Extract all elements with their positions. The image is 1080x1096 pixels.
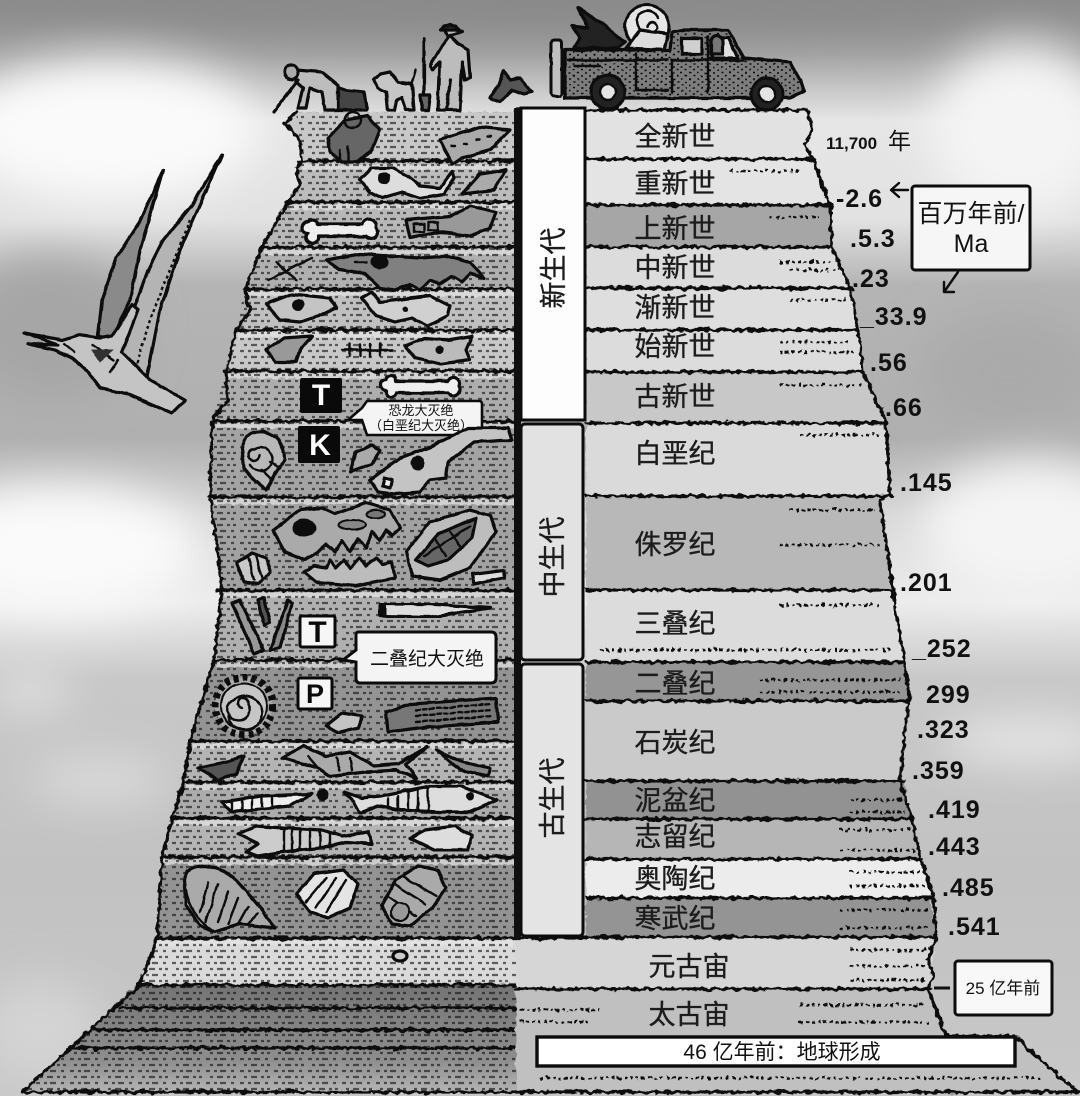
right strata column background — [516, 110, 1078, 1092]
era column: Paleozoic — [521, 664, 583, 936]
era column: Paleozoic: 古生代 — [538, 758, 568, 838]
fossil: orthocone — [378, 604, 490, 617]
callout: 2.5 billion years: 25 亿年前 — [966, 979, 1040, 998]
period labels: 白垩纪 — [634, 439, 716, 469]
age numbers — [826, 128, 1001, 941]
age numbers: 299 — [926, 681, 971, 709]
era column: Cenozoic: 新生代 — [539, 228, 569, 308]
fern in truck bed — [572, 8, 625, 48]
period labels: 元古宙 — [648, 952, 730, 982]
period labels: 始新世 — [634, 332, 716, 362]
age numbers: .66 — [885, 394, 923, 422]
age numbers: .541 — [948, 913, 1001, 941]
fossils: Quaternary saber skull and leaf — [328, 112, 510, 164]
callout: Permian extinction: 二叠纪大灭绝 — [370, 648, 484, 670]
callout: 2.5 billion years — [934, 961, 1052, 1015]
arrow: to 33.9 — [944, 272, 958, 292]
age numbers: .485 — [942, 874, 995, 902]
fossil: enrolled trilobite — [382, 866, 446, 926]
fossil: shell near P — [326, 713, 362, 733]
icon: dog — [374, 70, 416, 110]
marker: T white box — [300, 616, 335, 649]
era column: Mesozoic: 中生代 — [538, 516, 568, 598]
fossil: theropod skull — [273, 503, 400, 586]
marker: P white box: P — [306, 679, 324, 709]
era column: Cenozoic — [521, 108, 585, 420]
age numbers: .145 — [900, 469, 953, 497]
period labels: 上新世 — [634, 214, 716, 244]
column divider — [514, 110, 521, 938]
icon: pickup truck with ammonite and fern — [551, 5, 804, 110]
age numbers: _33.9 — [859, 303, 928, 331]
callout: Ma unit — [912, 186, 1030, 270]
callout: dinosaur extinction: （白垩纪大灭绝） — [369, 418, 473, 433]
fossil: fish skeleton — [344, 786, 497, 813]
fossil: crested dinosaur skull — [370, 428, 512, 494]
period labels: 中新世 — [634, 253, 716, 283]
fossil: small shell — [237, 553, 271, 584]
period labels: 石炭纪 — [634, 728, 716, 758]
period labels: 二叠纪 — [634, 669, 716, 699]
fossil: fern in oval — [406, 510, 504, 584]
fossil: small shell lump — [410, 826, 472, 850]
fossils: small bones — [266, 336, 472, 364]
fossil: pebble — [393, 951, 407, 961]
fossil: trilobite — [184, 866, 275, 932]
callout: Permian extinction — [343, 632, 496, 683]
marker: K black box — [298, 426, 340, 463]
period labels: 寒武纪 — [634, 904, 716, 934]
arrow: to 2.6 — [891, 183, 908, 197]
callout: dinosaur extinction — [348, 401, 482, 435]
fossil: fan shell — [198, 756, 244, 780]
fossils: skull with tusk and leaf — [360, 168, 506, 198]
age numbers: .323 — [917, 716, 970, 744]
period labels: 侏罗纪 — [634, 530, 716, 560]
icon: shrub — [490, 70, 532, 102]
fossil: long fish — [282, 746, 427, 778]
age numbers: 年 — [888, 128, 911, 154]
age numbers: -2.6 — [836, 185, 883, 213]
age numbers: .359 — [912, 757, 965, 785]
icon: crouching fossil hunter — [274, 65, 367, 112]
fossil: seed stalks — [232, 598, 292, 654]
age numbers: .23 — [852, 265, 890, 293]
fossil: crinoid stem — [386, 698, 498, 732]
truck body — [551, 30, 804, 110]
icon: pterosaur — [24, 155, 222, 413]
period labels: 全新世 — [634, 122, 716, 152]
marker: T black box: T — [312, 379, 330, 412]
age numbers: _252 — [911, 635, 972, 663]
marker: P white box — [298, 678, 332, 709]
period labels: 渐新世 — [634, 293, 716, 323]
fossils: two skulls — [266, 292, 450, 326]
callout: Ma unit: Ma — [954, 230, 988, 258]
age numbers: .443 — [928, 833, 981, 861]
stipple rows — [20, 110, 516, 1095]
period labels — [634, 122, 730, 1030]
marker: T white box: T — [308, 616, 327, 649]
period labels: 三叠纪 — [634, 609, 716, 639]
period labels: 奥陶纪 — [634, 864, 716, 894]
period labels: 古新世 — [634, 382, 716, 412]
period labels: 志留纪 — [634, 822, 716, 852]
age numbers: .5.3 — [850, 225, 896, 253]
callout: dinosaur extinction: 恐龙大灭绝 — [388, 403, 454, 418]
period labels: 泥盆纪 — [634, 786, 716, 816]
marker: K black box: K — [309, 429, 331, 462]
fossil: segmented worm — [222, 789, 329, 812]
ammonite in truck bed — [625, 5, 669, 50]
fossil: frond — [436, 750, 490, 776]
period labels: 重新世 — [634, 169, 716, 199]
age numbers: .419 — [928, 796, 981, 824]
fossil: ammonite — [242, 432, 284, 490]
fossil: sea scorpion — [238, 826, 372, 856]
fossil: clam — [296, 870, 358, 918]
age numbers: .56 — [870, 349, 908, 377]
bar: Earth formation — [537, 1037, 1015, 1066]
marker: T black box — [300, 378, 342, 413]
fossil: spiky ammonite — [215, 677, 273, 735]
fossil: leaf by K marker — [350, 445, 380, 472]
period labels: 太古宙 — [648, 1000, 730, 1030]
bar: Earth formation: 46 亿年前：地球形成 — [683, 1041, 881, 1064]
left cliff strata with fossil layers — [20, 110, 516, 1095]
age numbers: .201 — [900, 569, 953, 597]
era column: Mesozoic — [521, 424, 583, 660]
fossils: bone and jaw — [302, 206, 496, 243]
fossil: bone — [381, 375, 460, 397]
age numbers: 11,700 — [826, 134, 877, 153]
fossils: large herbivore skull and twig — [268, 254, 484, 290]
icon: standing man with shovel — [420, 24, 470, 110]
callout: Ma unit: 百万年前/ — [918, 200, 1025, 228]
